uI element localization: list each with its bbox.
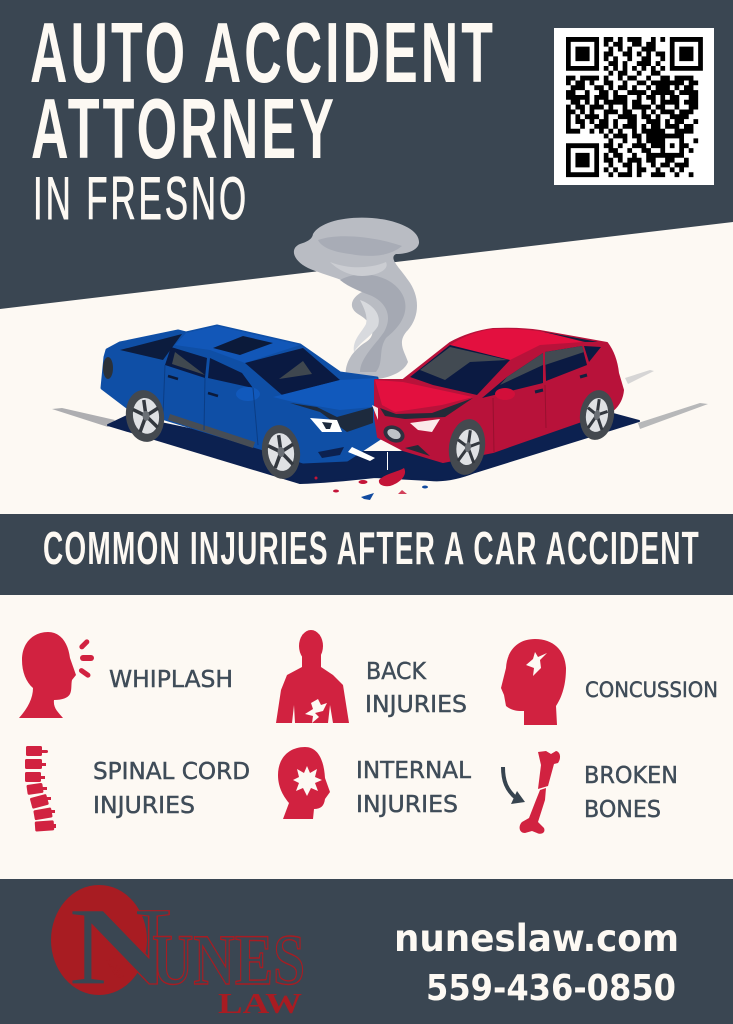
label: back injuries	[365, 659, 467, 718]
label: spinal cord injuries	[93, 759, 250, 819]
label: internal injuries: INTERNAL	[356, 758, 471, 784]
logo: Nunes Law: LAW	[218, 989, 302, 1020]
header background panel	[0, 0, 733, 309]
icon: internal injury head	[278, 747, 330, 819]
blue front wheel	[258, 423, 304, 481]
title: ATTORNEY	[31, 82, 337, 177]
logo: Nunes Law: LAW	[103, 956, 126, 983]
red rear wheel	[577, 388, 617, 442]
icon: concussion head	[501, 639, 566, 725]
banner heading	[0, 514, 733, 595]
icon: spine	[25, 746, 56, 832]
phone number: 559-436-0850	[426, 968, 676, 1009]
title: IN FRESNO	[33, 165, 249, 232]
label: whiplash: WHIPLASH	[109, 667, 233, 693]
label: internal injuries	[356, 758, 471, 818]
label: back injuries: INJURIES	[365, 692, 467, 718]
crash debris	[314, 452, 428, 500]
skid marks	[52, 370, 708, 429]
footer panel	[0, 879, 733, 1024]
logo: Nunes Law: UNES	[152, 920, 305, 1000]
label: broken bones: BROKEN	[584, 763, 678, 789]
label: broken bones	[584, 763, 678, 823]
car shadow	[108, 414, 639, 483]
label: spinal cord injuries: INJURIES	[93, 793, 195, 819]
blue rear wheel	[123, 388, 167, 444]
QR code	[554, 28, 714, 185]
label: spinal cord injuries: SPINAL CORD	[93, 759, 250, 785]
smoke	[294, 218, 419, 380]
label: broken bones: BONES	[584, 797, 661, 823]
label: concussion: CONCUSSION	[585, 678, 718, 702]
logo: Nunes Law: N	[69, 885, 171, 1009]
label: internal injuries: INJURIES	[356, 792, 458, 818]
icon: back injury torso	[276, 630, 349, 723]
title	[30, 6, 496, 232]
icon: broken bone with arrow	[503, 751, 560, 834]
label: back injuries: BACK	[366, 659, 427, 685]
red front wheel	[445, 417, 489, 477]
red hatchback car	[372, 329, 623, 477]
logo: Nunes Law	[51, 885, 305, 1020]
icon: whiplash head	[19, 632, 94, 718]
blue pickup truck	[102, 326, 382, 481]
website: nuneslaw.com	[394, 917, 679, 960]
